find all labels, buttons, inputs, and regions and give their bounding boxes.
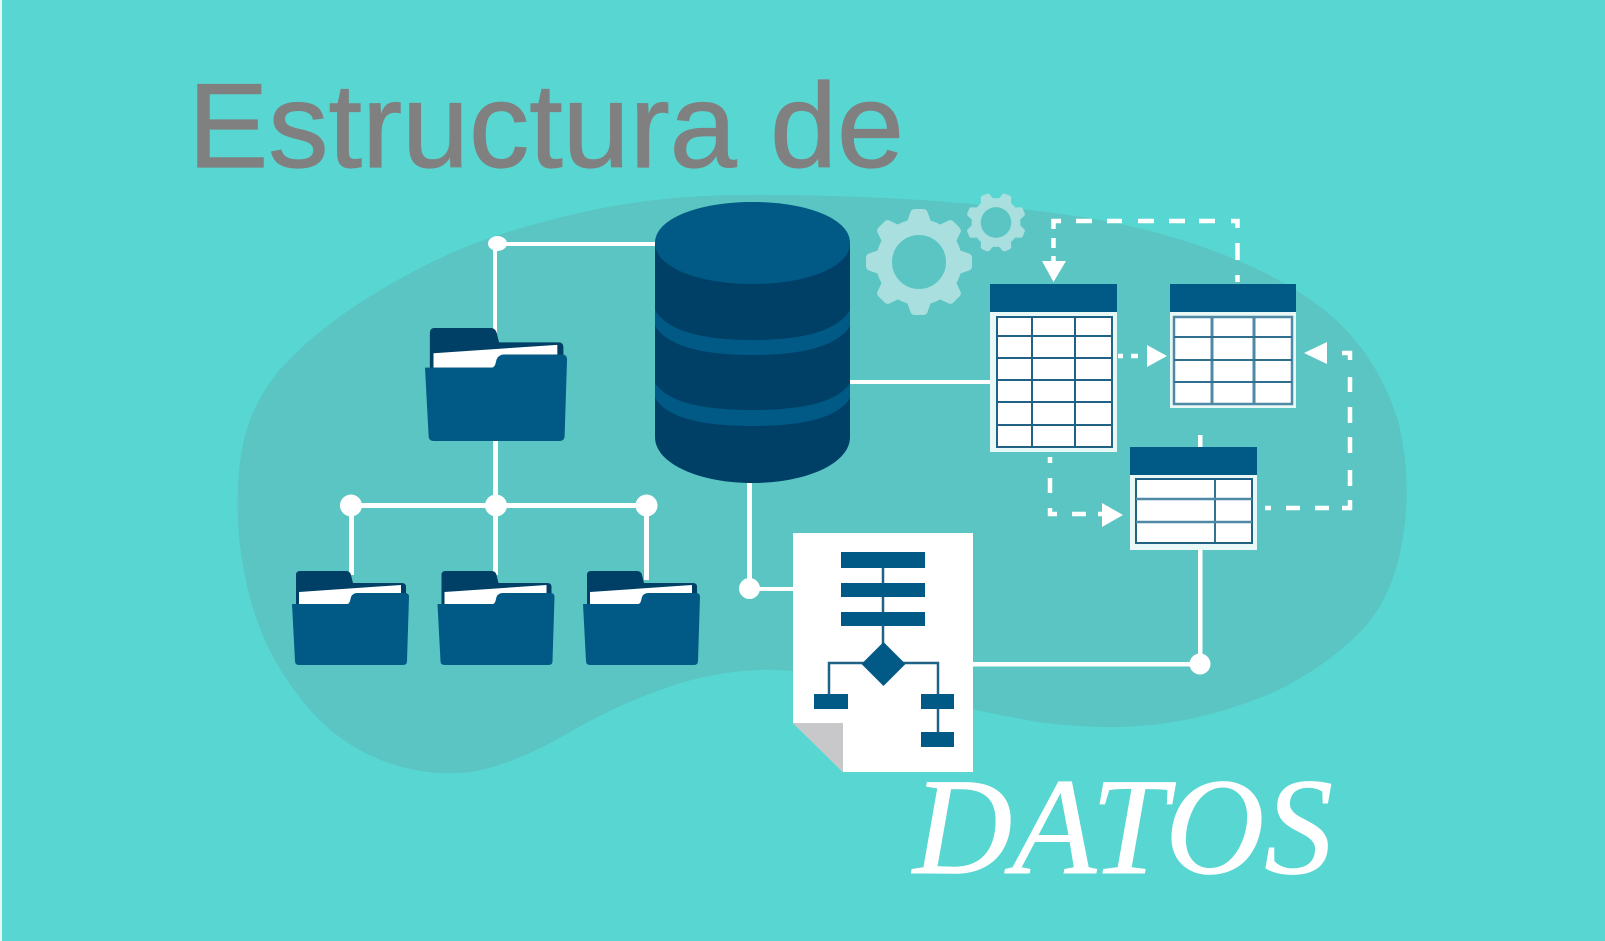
table 1 (990, 284, 1117, 452)
small folder 3 (583, 571, 700, 665)
small folder 1 (292, 571, 409, 665)
dashed arrow: table 1 to table 2 (1118, 345, 1167, 367)
dashed arrow: table 1 to table 3 (1050, 457, 1123, 527)
table 2 (1170, 284, 1296, 408)
flowchart document (793, 533, 973, 772)
database cylinder (655, 202, 850, 483)
background blob (238, 195, 1407, 773)
title: DATOS: DATOS (911, 750, 1333, 903)
connector lines and nodes (340, 236, 1210, 674)
dashed arrow: table 3 to table 2 (1265, 342, 1350, 508)
icon: large gear (866, 209, 972, 315)
title: Estructura de: Estructura de (188, 59, 904, 193)
large folder (425, 328, 567, 441)
dashed arrow: table 2 to table 1 (1042, 221, 1238, 282)
icon: small gear (957, 183, 1035, 262)
small folder 2 (438, 571, 554, 665)
table 3 (1130, 447, 1257, 550)
